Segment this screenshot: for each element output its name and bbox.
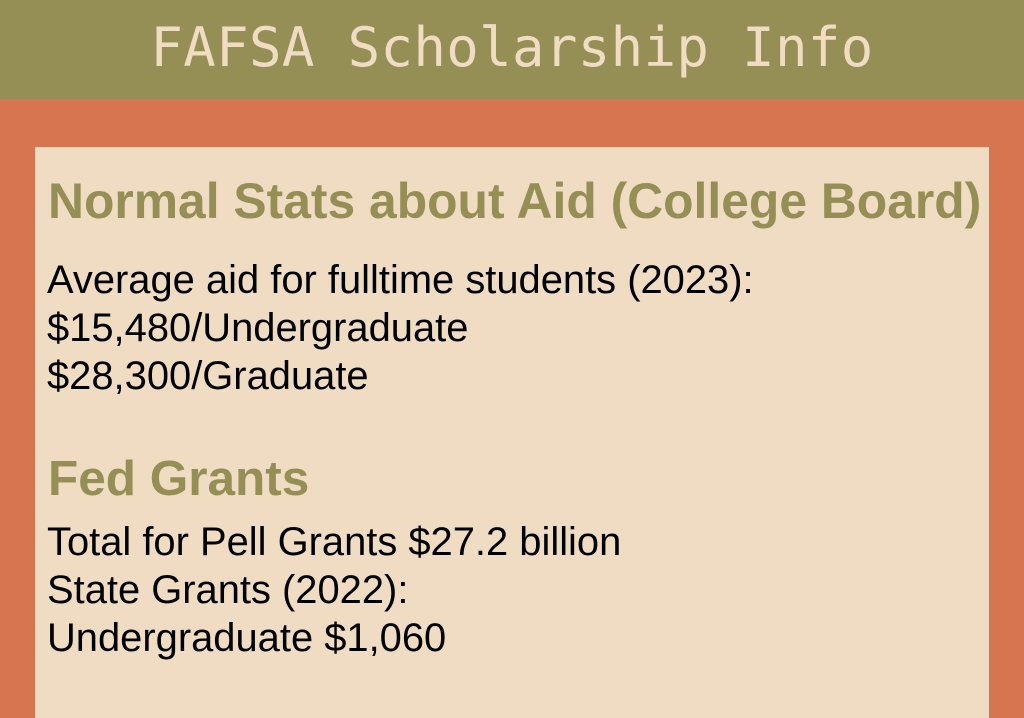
text block: average aid: Average aid for fulltime students (2023): <box>47 258 754 302</box>
text block: average aid <box>47 258 754 398</box>
text block: grants: Total for Pell Grants $27.2 billion <box>47 520 621 564</box>
text block: average aid: $28,300/Graduate <box>47 354 369 398</box>
text block: grants <box>47 520 621 660</box>
heading: normal stats: Normal Stats about Aid (College Board) <box>48 173 981 229</box>
heading: fed grants: Fed Grants <box>48 451 309 506</box>
text block: grants: State Grants (2022): <box>47 568 408 612</box>
title: FAFSA Scholarship Info <box>150 16 874 79</box>
panel: content <box>35 147 989 718</box>
text block: average aid: $15,480/Undergraduate <box>47 306 468 350</box>
text block: grants: Undergraduate $1,060 <box>47 616 446 660</box>
header band <box>0 0 1024 99</box>
